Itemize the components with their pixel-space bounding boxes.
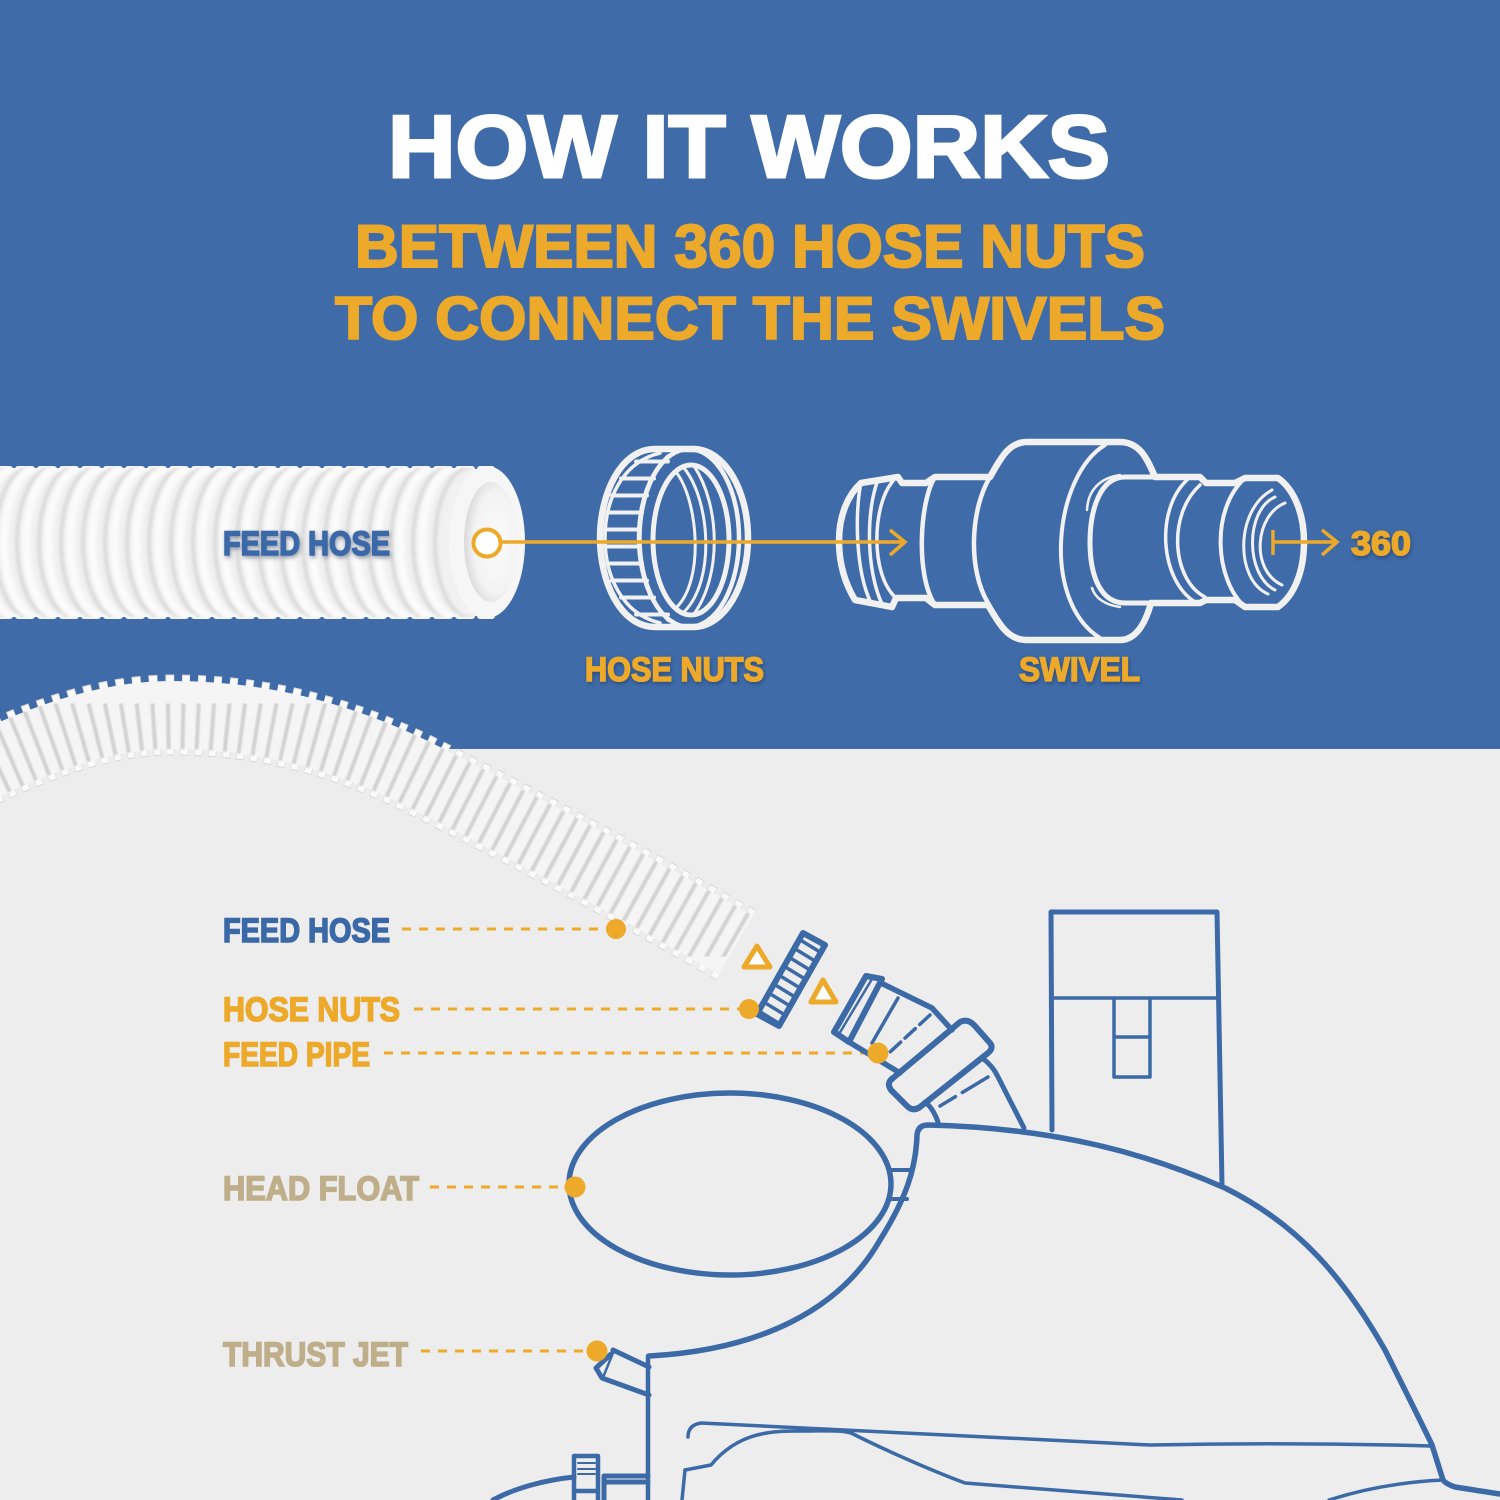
box on top of cleaner xyxy=(1051,912,1222,1185)
callout: thrust jet: THRUST JET xyxy=(223,1336,408,1374)
feed hose close-up xyxy=(0,466,525,619)
hose nut illustration xyxy=(600,449,748,627)
callout dot: head float xyxy=(564,1176,586,1198)
callout dot: feed pipe xyxy=(868,1042,888,1064)
callout: feed pipe: FEED PIPE xyxy=(223,1036,370,1074)
panel: light grey lower background xyxy=(0,749,1500,1500)
callout dot: thrust jet xyxy=(586,1340,608,1362)
title: HOW IT WORKS xyxy=(388,97,1110,196)
arrow: 360 rotation xyxy=(1273,530,1337,555)
label: feed hose on hose: FEED HOSE xyxy=(223,525,390,563)
callout: hose nuts: HOSE NUTS xyxy=(223,991,400,1029)
swivel label: SWIVEL xyxy=(1019,651,1140,689)
360 label: 360 xyxy=(1351,525,1411,563)
thrust jet xyxy=(596,1350,649,1395)
feed pipe elbow xyxy=(834,976,1024,1128)
icon: hose nut side view xyxy=(757,933,825,1026)
cleaner body outline xyxy=(648,1125,1500,1500)
callout: head float: HEAD FLOAT xyxy=(223,1170,419,1208)
callout: feed hose: FEED HOSE xyxy=(223,912,390,950)
subtitle xyxy=(335,213,1165,352)
corrugated hose curve xyxy=(0,715,736,945)
callout: feed hose xyxy=(223,912,626,950)
swivel illustration xyxy=(839,442,1304,640)
subtitle: BETWEEN 360 HOSE NUTS xyxy=(355,213,1145,280)
base fitting xyxy=(493,1456,648,1500)
callout dot: hose nuts xyxy=(739,999,759,1019)
head float xyxy=(569,1093,912,1275)
subtitle: TO CONNECT THE SWIVELS xyxy=(335,285,1165,352)
icon: upper gold triangle xyxy=(744,946,770,967)
icon: lower gold triangle xyxy=(811,980,836,1002)
panel: blue top background xyxy=(0,0,1500,749)
hose nuts label: HOSE NUTS xyxy=(585,651,764,689)
flow arrow through hose, nut and swivel xyxy=(474,530,905,556)
